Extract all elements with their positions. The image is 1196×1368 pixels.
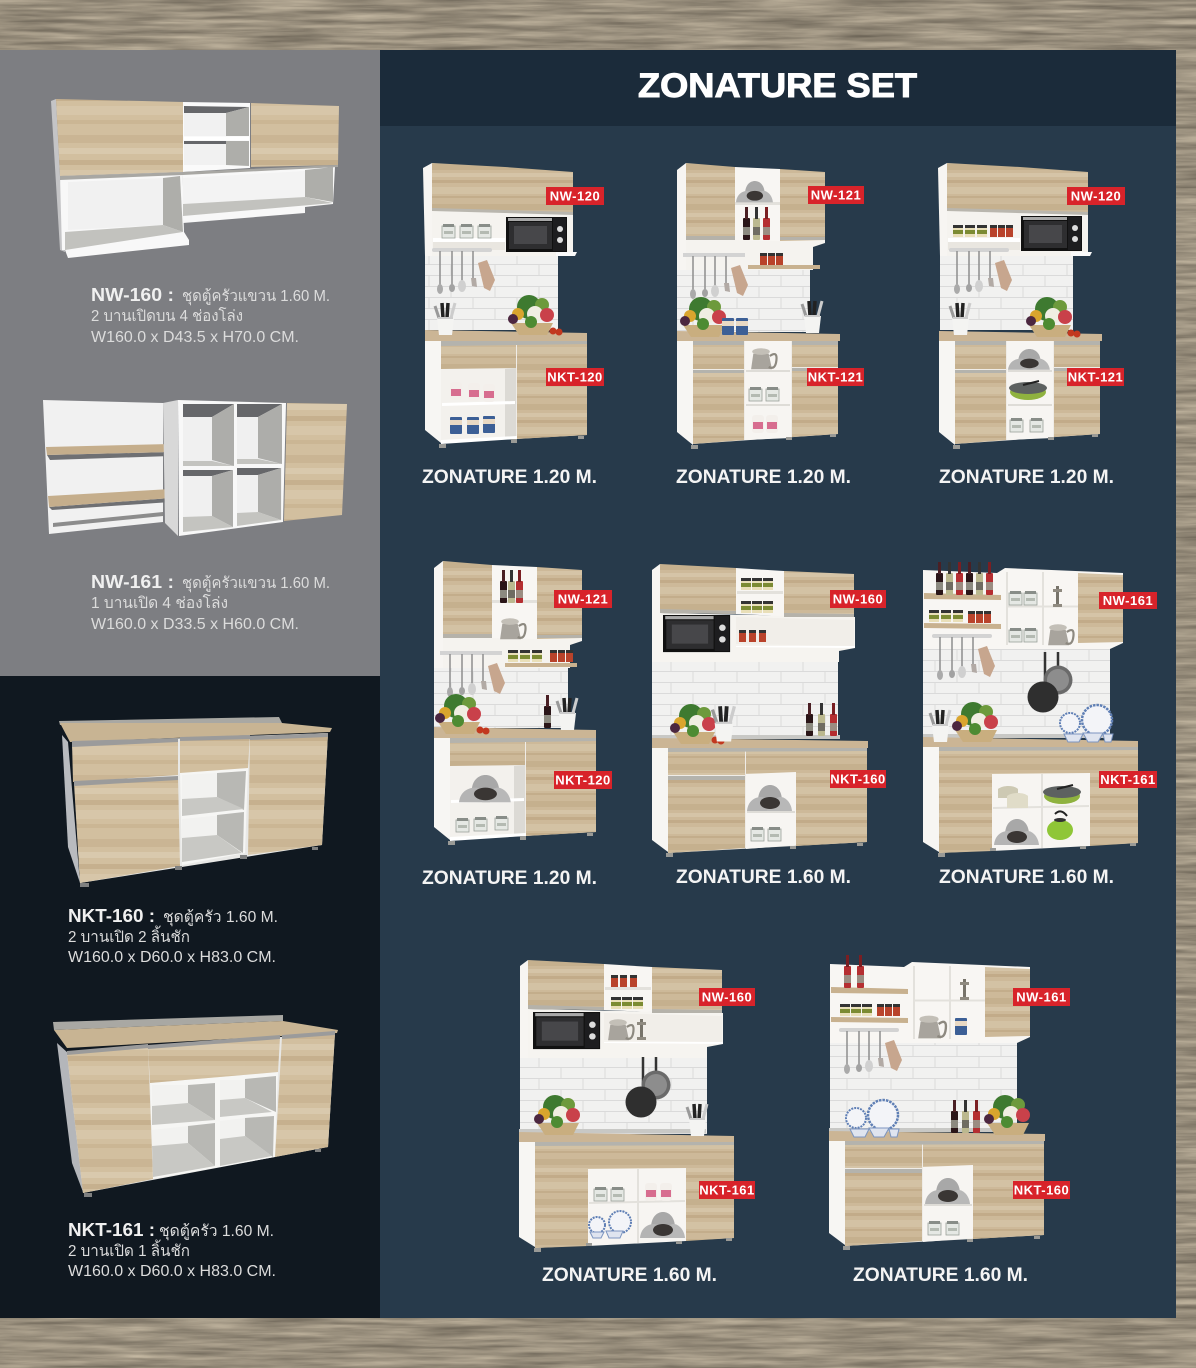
set 6: NW-161 + NKT-161 [923, 562, 1157, 888]
panel: Zonature set [380, 50, 1176, 1318]
NKT-161 description: ชุดตู้ครัว 1.60 M. [159, 1223, 274, 1241]
NW-160 description [91, 284, 330, 346]
set 2: NW-121 + NKT-121 [676, 163, 864, 488]
NKT-161 description [68, 1219, 276, 1280]
set 6: NW-161 + NKT-161: NW-161 [1103, 593, 1153, 608]
set 2: NW-121 + NKT-121: ZONATURE 1.20 M. [676, 467, 851, 488]
panel: wall cabinets (grey) [0, 50, 380, 676]
NW-161 description: 1 บานเปิด 4 ช่องโล่ง [91, 594, 228, 612]
NW-160 description: ชุดตู้ครัวแขวน 1.60 M. [182, 288, 330, 306]
set 1: NW-120 + NKT-120 [422, 163, 604, 488]
set 4: NW-121 + NKT-120: ZONATURE 1.20 M. [422, 868, 597, 889]
NW-161 description [91, 571, 330, 633]
NW-160 description: NW-160 : [91, 284, 174, 305]
NKT-160 description: 2 บานเปิด 2 ลิ้นชัก [68, 925, 190, 946]
NKT-161 description: 2 บานเปิด 1 ลิ้นชัก [68, 1239, 190, 1260]
set 6: NW-161 + NKT-161: ZONATURE 1.60 M. [939, 867, 1114, 888]
NKT-161 description: NKT-161 : [68, 1219, 155, 1240]
set 4: NW-121 + NKT-120 [422, 561, 612, 889]
set 5: NW-160 + NKT-160: NKT-160 [830, 772, 886, 786]
NW-160 description: W160.0 x D43.5 x H70.0 CM. [91, 329, 299, 346]
NKT-160 description: NKT-160 : [68, 905, 155, 926]
set 8: NW-161 + NKT-160: ZONATURE 1.60 M. [853, 1265, 1028, 1286]
title bar [380, 50, 1176, 126]
NKT-161 cabinet [53, 1015, 338, 1197]
NKT-160 description [68, 905, 278, 966]
set 2: NW-121 + NKT-121: NW-121 [811, 188, 861, 202]
set 3: NW-120 + NKT-121 [938, 163, 1125, 488]
set 7: NW-160 + NKT-161 [519, 960, 755, 1286]
set 1: NW-120 + NKT-120: NW-120 [550, 188, 600, 204]
NKT-161 description: W160.0 x D60.0 x H83.0 CM. [68, 1263, 276, 1280]
NW-161 description: W160.0 x D33.5 x H60.0 CM. [91, 616, 299, 633]
set 7: NW-160 + NKT-161: NKT-161 [699, 1182, 755, 1198]
set 7: NW-160 + NKT-161: ZONATURE 1.60 M. [542, 1265, 717, 1286]
set 5: NW-160 + NKT-160: NW-160 [833, 592, 883, 606]
set 2: NW-121 + NKT-121: NKT-121 [808, 370, 863, 384]
NW-161 description: NW-161 : [91, 571, 174, 592]
set 5: NW-160 + NKT-160: ZONATURE 1.60 M. [676, 867, 851, 888]
set 1: NW-120 + NKT-120: ZONATURE 1.20 M. [422, 467, 597, 488]
set 4: NW-121 + NKT-120: NW-121 [558, 592, 608, 606]
set 4: NW-121 + NKT-120: NKT-120 [555, 772, 611, 788]
set 8: NW-161 + NKT-160: NW-161 [1016, 990, 1067, 1004]
NW-160 cabinet [51, 99, 339, 258]
set 6: NW-161 + NKT-161: NKT-161 [1100, 772, 1156, 787]
set 3: NW-120 + NKT-121: ZONATURE 1.20 M. [939, 467, 1114, 488]
NKT-160 cabinet [59, 717, 332, 887]
NW-161 cabinet [43, 400, 347, 536]
NW-160 description: 2 บานเปิดบน 4 ช่องโล่ง [91, 307, 243, 325]
title: ZONATURE SET [638, 67, 917, 105]
set 5: NW-160 + NKT-160 [652, 564, 886, 888]
NKT-160 description: ชุดตู้ครัว 1.60 M. [163, 909, 278, 927]
NKT-160 description: W160.0 x D60.0 x H83.0 CM. [68, 949, 276, 966]
set 8: NW-161 + NKT-160: NKT-160 [1014, 1182, 1069, 1198]
set 3: NW-120 + NKT-121: NW-120 [1071, 188, 1121, 204]
set 8: NW-161 + NKT-160 [829, 955, 1070, 1286]
set 3: NW-120 + NKT-121: NKT-121 [1068, 370, 1123, 384]
set 1: NW-120 + NKT-120: NKT-120 [547, 370, 603, 384]
panel: base cabinets (dark) [0, 676, 380, 1318]
NW-161 description: ชุดตู้ครัวแขวน 1.60 M. [182, 575, 330, 593]
set 7: NW-160 + NKT-161: NW-160 [702, 990, 752, 1004]
